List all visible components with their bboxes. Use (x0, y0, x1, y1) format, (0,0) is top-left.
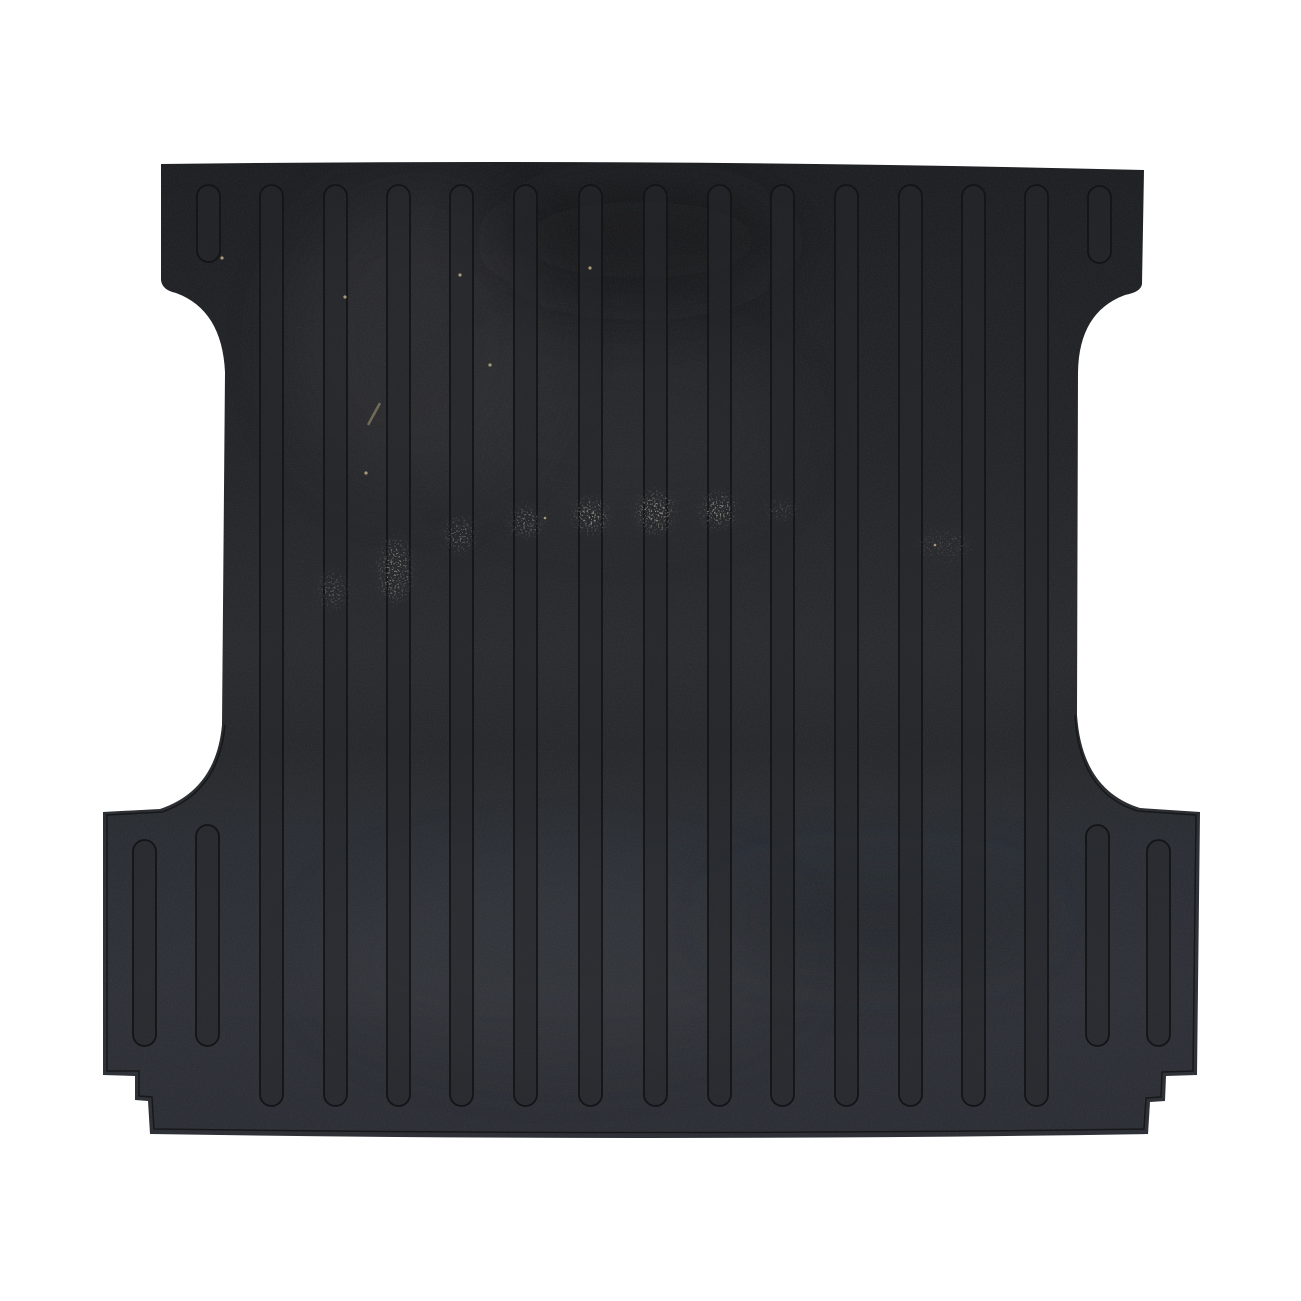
debris and scuffs (220, 256, 980, 620)
raised ribs (133, 185, 1170, 1106)
truck bed mat photo illustration (103, 162, 1200, 1138)
mat body (100, 160, 1200, 1140)
